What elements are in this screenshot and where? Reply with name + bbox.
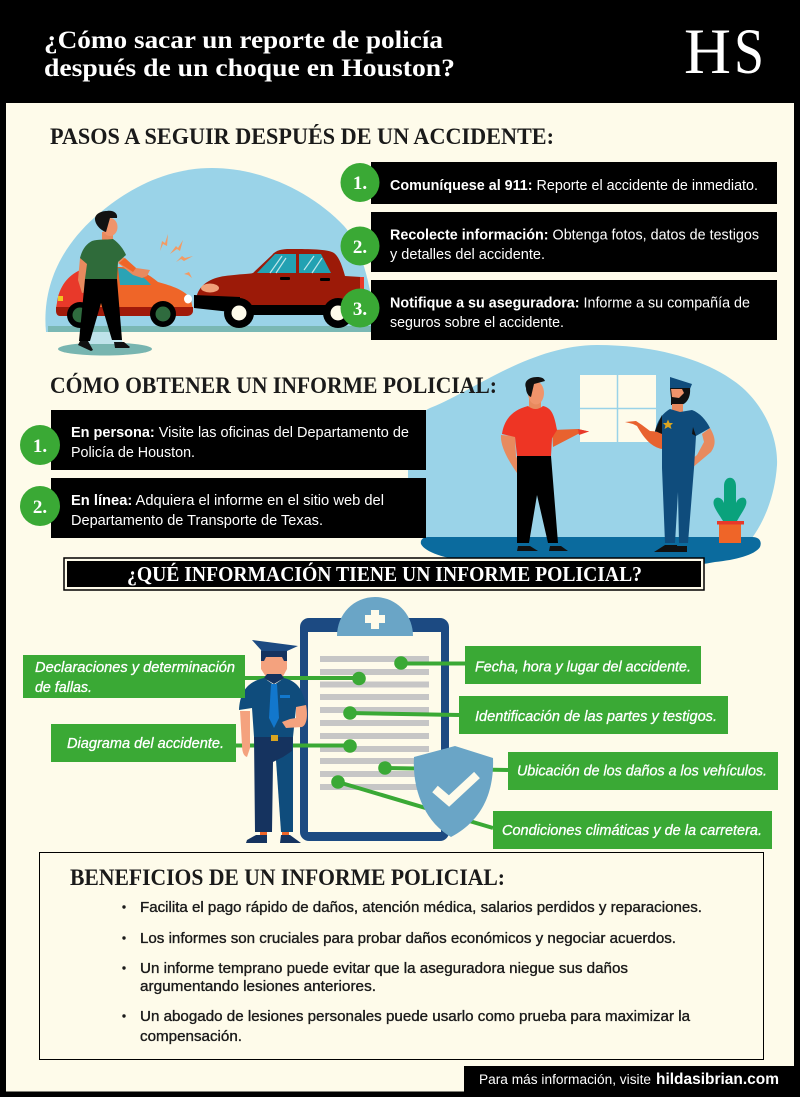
- footer: Para más información, visite: [479, 1072, 651, 1087]
- label: diagrama: Diagrama del accidente.: [67, 736, 224, 752]
- panel: benefits: Los informes son cruciales para probar daños económicos y negociar acuerdos.: [140, 931, 676, 947]
- label: declaraciones: Declaraciones y determinación: [35, 660, 235, 676]
- connector lines: [236, 656, 508, 828]
- step 3: Notifique a su aseguradora: Informe a su compañía de: [390, 296, 750, 312]
- panel: benefits: Facilita el pago rápido de daños, atención médica, salarios perdidos y reparaciones.: [140, 900, 702, 916]
- label: ubicacion: [508, 752, 778, 790]
- option 2: online: En línea: Adquiera el informe en el sitio web del: [71, 493, 384, 509]
- step 2: Recolecte información: Obtenga fotos, datos de testigos: [390, 228, 759, 244]
- panel: benefits: compensación.: [140, 1029, 242, 1045]
- logo: HS: S: [734, 16, 764, 88]
- footer: [464, 1066, 800, 1097]
- title: después de un choque en Houston?: [44, 55, 455, 82]
- title: [44, 27, 455, 82]
- label: condiciones: Condiciones climáticas y de la carretera.: [502, 823, 762, 839]
- banner heading: ¿QUÉ INFORMACIÓN TIENE UN INFORME POLICIAL?: [127, 562, 642, 586]
- logo: HS: [684, 16, 764, 88]
- option 2: online: Departamento de Transporte de Texas.: [71, 513, 323, 529]
- label: diagrama: [51, 724, 236, 762]
- label: fecha: [465, 646, 701, 684]
- title: ¿Cómo sacar un reporte de policía: [44, 27, 444, 54]
- illustration: citizen talking with police officer: [408, 345, 777, 565]
- orange car: [56, 267, 193, 328]
- panel: benefits: Un informe temprano puede evitar que la aseguradora niegue sus daños: [140, 961, 628, 977]
- option 1: in person: 1.: [33, 436, 47, 457]
- illustration: car accident scene: [45, 168, 376, 356]
- panel: benefits: [40, 852, 764, 1060]
- step 2: y detalles del accidente.: [390, 247, 545, 263]
- label: condiciones: [493, 811, 772, 849]
- officer illustration: [239, 640, 307, 843]
- panel: benefits: Un abogado de lesiones personales puede usarlo como prueba para maximizar la: [140, 1009, 690, 1025]
- step 1: 1.: [353, 173, 367, 194]
- plant: [713, 478, 746, 543]
- man in red shirt: [501, 377, 589, 551]
- sparks: [160, 234, 193, 278]
- window: [580, 375, 656, 442]
- option 2: online: 2.: [33, 497, 47, 518]
- heading: pasos a seguir: PASOS A SEGUIR DESPUÉS DE UN ACCIDENTE:: [50, 124, 554, 149]
- step 2: 2.: [353, 237, 367, 258]
- option 1: in person: En persona: Visite las oficinas del Departamento de: [71, 425, 409, 441]
- step 3: [340, 280, 777, 340]
- logo: HS: H: [684, 16, 731, 88]
- option 2: online: [20, 478, 426, 538]
- banner heading: [64, 558, 704, 590]
- step 1: Comuníquese al 911: Reporte el accidente de inmediato.: [390, 178, 758, 194]
- label: identificacion: [459, 696, 728, 734]
- step 3: seguros sobre el accidente.: [390, 315, 564, 331]
- step 1: [340, 162, 777, 204]
- police officer: [625, 377, 715, 552]
- option 1: in person: [20, 410, 426, 470]
- label: identificacion: Identificación de las partes y testigos.: [475, 709, 717, 725]
- step 2: [340, 212, 777, 272]
- heading: benefits: BENEFICIOS DE UN INFORME POLICIAL:: [70, 865, 505, 890]
- label: ubicacion: Ubicación de los daños a los vehículos.: [517, 764, 767, 780]
- heading: como obtener: CÓMO OBTENER UN INFORME POLICIAL:: [50, 372, 497, 398]
- clipboard illustration: [300, 597, 449, 841]
- panel: benefits: argumentando lesiones anteriores.: [140, 979, 376, 995]
- step 3: 3.: [353, 299, 367, 320]
- label: declaraciones: de fallas.: [35, 680, 92, 696]
- man: [78, 211, 150, 351]
- footer: hildasibrian.com: [656, 1071, 779, 1088]
- label: fecha: Fecha, hora y lugar del accidente.: [475, 660, 691, 676]
- red car: [194, 249, 364, 328]
- label: declaraciones: [23, 655, 245, 698]
- icon: shield with check: [414, 746, 493, 837]
- option 1: in person: Policía de Houston.: [71, 445, 195, 461]
